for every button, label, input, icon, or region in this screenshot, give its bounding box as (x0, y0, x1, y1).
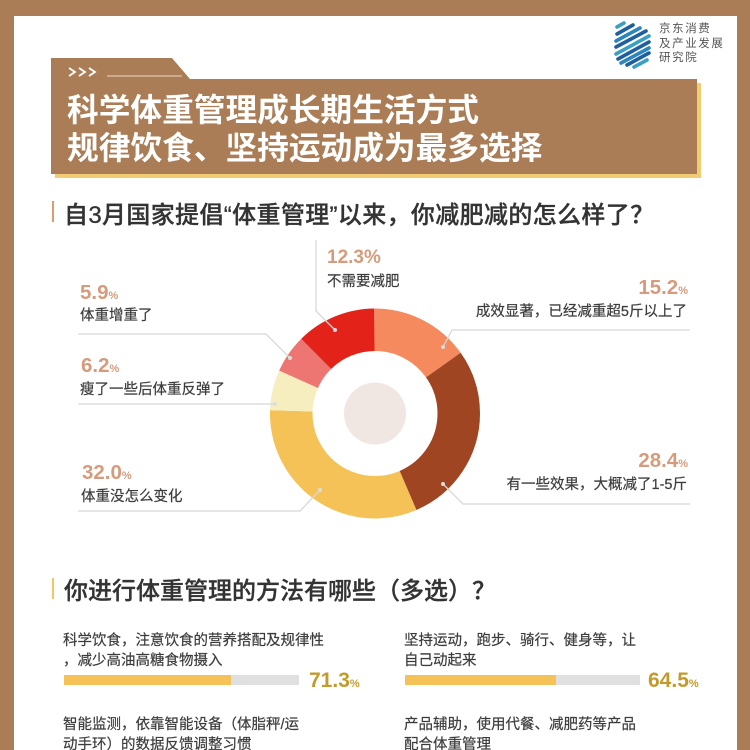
bar (64, 675, 299, 685)
logo text: 及产业发展 (659, 38, 724, 50)
bar fill (64, 675, 231, 685)
callout: 32.0% (81, 461, 182, 505)
value: 6.2% (81, 354, 119, 377)
value: 64.5% (648, 669, 699, 692)
item text (63, 632, 324, 669)
item text: 自己动起来 (404, 653, 476, 669)
item text: 坚持运动，跑步、骑行、健身等，让 (404, 633, 636, 649)
icon: striped hexagon logo mark (614, 21, 651, 69)
bar item: 坚持运动 64.5% (404, 632, 699, 692)
item text (404, 632, 636, 669)
callout: 5.9% (80, 281, 152, 324)
item text: 科学饮食，注意饮食的营养搭配及规律性 (63, 633, 324, 649)
heading text: 自3月国家提倡“体重管理”以来，你减肥减的怎么样了？ (64, 202, 654, 229)
item text (404, 716, 636, 750)
title banner (51, 58, 701, 178)
connector dots (273, 328, 445, 492)
banner tab and body (51, 58, 697, 174)
item text: ，减少高油高糖食物摄入 (63, 653, 222, 669)
value: 15.2% (638, 276, 688, 299)
value: 5.9% (80, 281, 118, 304)
logo text (659, 22, 724, 64)
donut chart (270, 308, 480, 518)
logo text: 京东消费 (659, 23, 711, 35)
callout: 6.2% (80, 354, 225, 398)
item text (63, 716, 299, 750)
title text (67, 92, 542, 166)
item text: 智能监测，依靠智能设备（体脂秤/运 (63, 717, 299, 733)
label: 瘦了一些后体重反弹了 (80, 382, 225, 398)
bar item: 科学饮食 71.3% (63, 632, 360, 692)
callout: 28.4% (507, 449, 688, 493)
callout: 15.2% (476, 276, 688, 320)
donut segments (291, 330, 459, 497)
bar (405, 675, 640, 685)
donut centre disc (344, 382, 406, 444)
label: 不需要减肥 (327, 274, 400, 290)
callout: 12.3% (327, 247, 400, 290)
banner shadow (55, 83, 701, 178)
bar fill (405, 675, 556, 685)
heading text: 你进行体重管理的方法有哪些（多选）？ (64, 578, 496, 605)
label: 成效显著，已经减重超5斤以上了 (476, 304, 687, 320)
label: 体重增重了 (80, 308, 152, 324)
value: 12.3% (327, 247, 381, 268)
value: 71.3% (309, 669, 360, 692)
title text: 规律饮食、坚持运动成为最多选择 (67, 130, 542, 166)
title text: 科学体重管理成长期生活方式 (67, 92, 479, 128)
item text: 产品辅助，使用代餐、减肥药等产品 (404, 717, 636, 733)
logo text: 研究院 (659, 52, 698, 64)
heading accent bar (52, 201, 54, 222)
label: 体重没怎么变化 (81, 489, 182, 505)
label: 有一些效果，大概减了1-5斤 (507, 477, 687, 493)
value: 32.0% (82, 461, 132, 484)
bar item: 智能监测 (63, 716, 299, 750)
value: 28.4% (638, 449, 688, 472)
bar item: 产品辅助 (404, 716, 636, 750)
leader lines (78, 240, 690, 512)
logo (614, 21, 724, 69)
heading accent bar (52, 578, 54, 599)
